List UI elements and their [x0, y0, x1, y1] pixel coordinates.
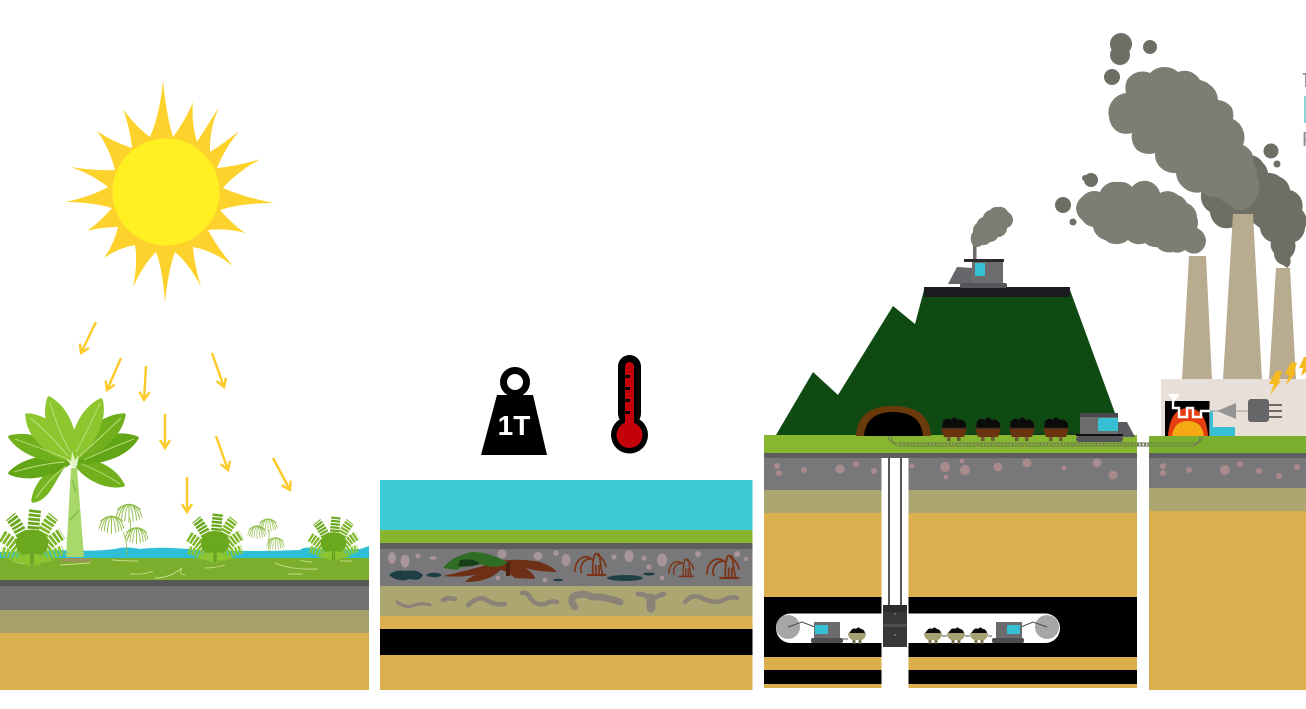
left cutting machine	[776, 615, 843, 643]
cropped side text	[1302, 71, 1306, 151]
palm tree	[10, 398, 137, 562]
smoke puffs	[1055, 33, 1280, 226]
cooling water tank	[1210, 411, 1235, 436]
fallen tree	[443, 552, 557, 582]
turbine	[1210, 403, 1248, 419]
rails to furnace	[1137, 436, 1203, 446]
flat top	[924, 287, 1070, 297]
mountain	[776, 290, 1118, 436]
thermometer icon	[611, 355, 648, 454]
lightning bolts	[1269, 357, 1306, 395]
strata	[764, 435, 1137, 688]
main smoke plume	[1109, 67, 1259, 210]
underground carts	[843, 628, 992, 644]
left smoke plume	[1076, 181, 1206, 254]
cooling towers	[1182, 214, 1296, 380]
pink rocks	[388, 550, 748, 582]
mine shaft	[882, 458, 908, 688]
back smoke plume	[1201, 155, 1306, 268]
panel: prehistoric forest	[0, 398, 369, 690]
petrified plants	[575, 554, 739, 579]
excavator smoke	[971, 207, 1013, 247]
surface dump truck	[1076, 413, 1135, 442]
surface excavator	[948, 245, 1007, 288]
fern centre	[188, 514, 242, 562]
strata	[380, 480, 752, 690]
panel: buried under pressure	[380, 480, 752, 690]
pink rocks	[774, 458, 1118, 480]
pink rocks	[1160, 461, 1300, 479]
fern left	[1, 510, 63, 565]
underground gallery	[776, 614, 1060, 643]
small palm fronds left	[99, 504, 148, 555]
generator	[1248, 399, 1282, 422]
sun	[65, 80, 274, 303]
fossil shapes	[397, 593, 737, 608]
strata	[1149, 436, 1306, 690]
weight icon	[481, 370, 547, 455]
sunlight arrows	[81, 322, 290, 512]
small palm fronds right	[248, 519, 284, 552]
soil layers	[0, 558, 369, 690]
surface rails	[888, 436, 1203, 446]
right cutting machine	[992, 615, 1059, 643]
weight icon: 1T	[498, 410, 530, 441]
mine entrance	[856, 406, 931, 436]
dark coal patches	[389, 570, 655, 581]
fern right	[309, 517, 358, 560]
panel: coal mine	[764, 207, 1203, 688]
rail ties across gap	[1137, 443, 1149, 446]
power plant building	[1161, 379, 1306, 437]
mine lift	[883, 605, 907, 647]
water	[0, 546, 369, 560]
grass details	[12, 560, 352, 578]
surface coal carts	[941, 418, 1080, 441]
panel: power station	[1055, 33, 1306, 690]
furnace	[1165, 394, 1210, 436]
